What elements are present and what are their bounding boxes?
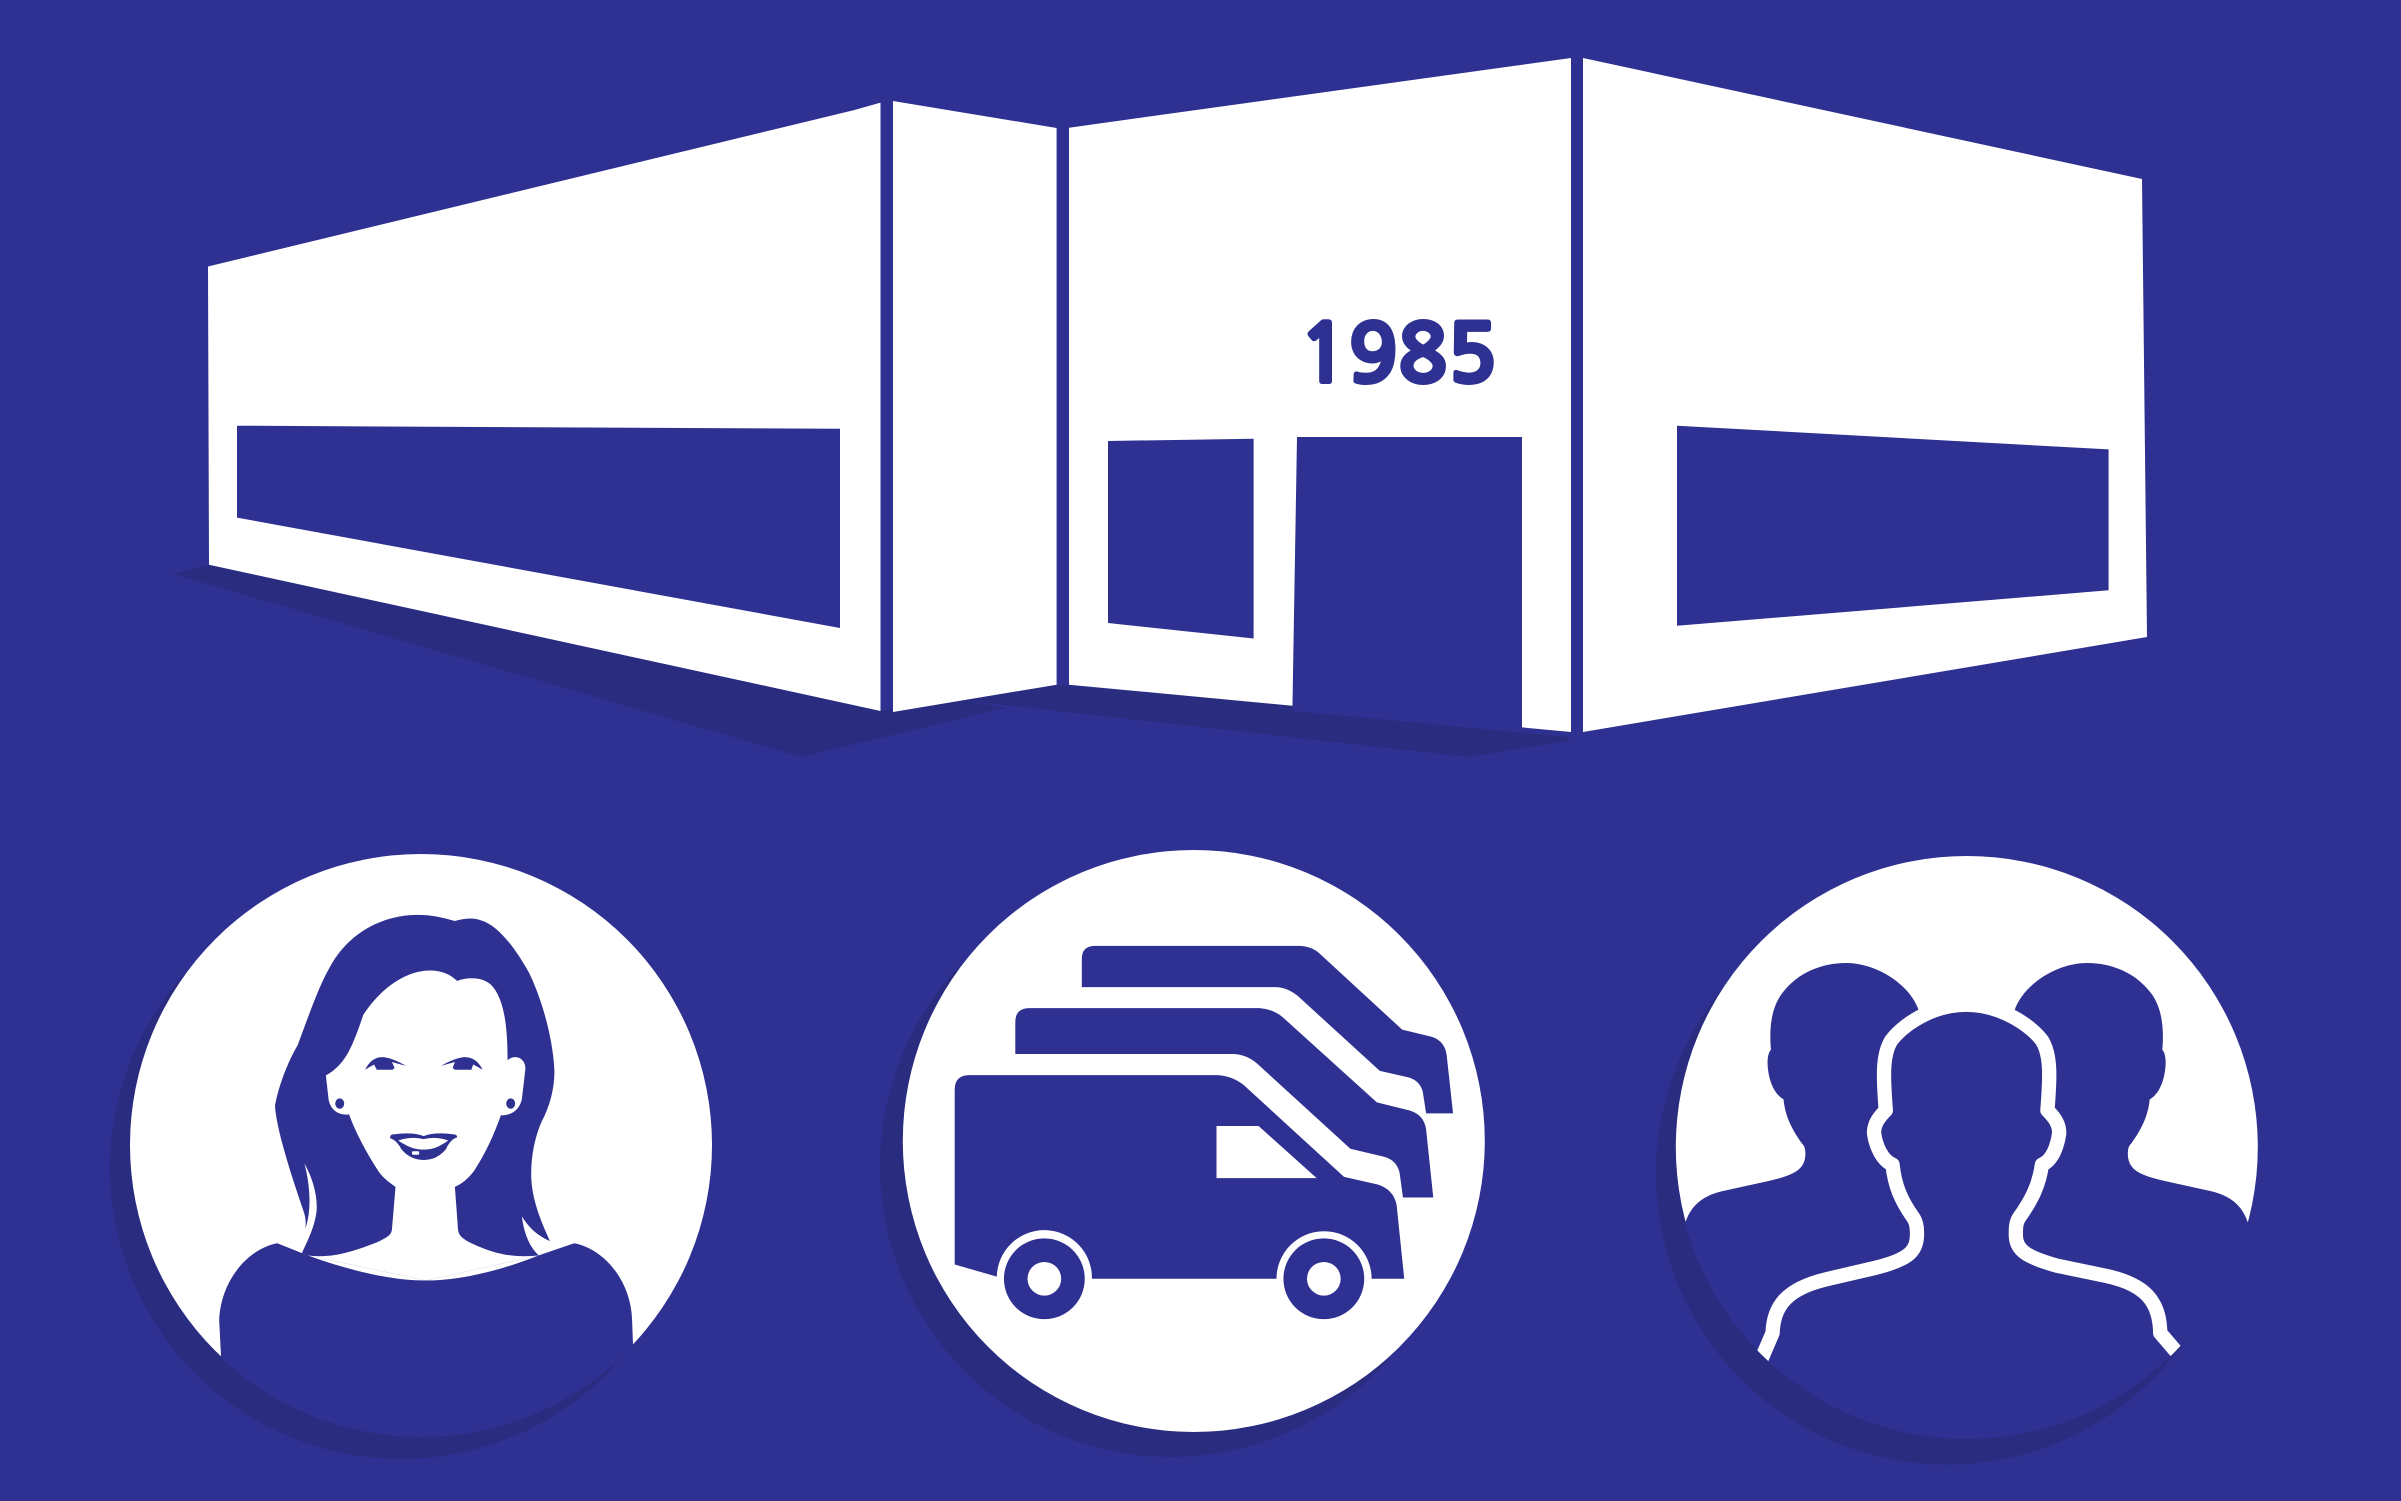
entrance door: [1292, 437, 1522, 731]
circle icon: woman: [110, 854, 712, 1494]
circle shadow: [880, 875, 1462, 1457]
front van body: [955, 1075, 1404, 1279]
circle shadow: [110, 877, 692, 1459]
woman figure: [219, 915, 633, 1494]
people silhouettes: [1685, 963, 2248, 1439]
centre wall window: [1108, 439, 1254, 638]
left earring: [335, 1098, 344, 1109]
right person: [1972, 963, 2248, 1439]
circle shadow: [1656, 883, 2238, 1465]
left eye: [365, 1057, 406, 1070]
torso: [219, 1243, 633, 1437]
mouth: [390, 1133, 457, 1160]
van fleet: [955, 946, 1453, 1319]
right wall window: [1677, 426, 2109, 626]
middle van: [1015, 1008, 1433, 1198]
rear wheel: [1004, 1238, 1085, 1319]
lip highlight: [412, 1151, 419, 1155]
right wall: [1583, 58, 2147, 732]
van window: [1217, 1126, 1317, 1178]
left wall: [208, 103, 880, 711]
back van: [1082, 946, 1453, 1113]
year sign: 1985: [1299, 315, 1497, 394]
white disc: [903, 850, 1485, 1432]
corner column: [893, 101, 1057, 712]
hair: [275, 915, 554, 1281]
building: [173, 58, 2147, 757]
left wall window: [237, 426, 840, 628]
left person: [1685, 963, 1961, 1439]
building ground shadow: [173, 565, 1569, 757]
face and neck: [308, 970, 539, 1281]
right eye: [441, 1057, 483, 1070]
white disc: [130, 854, 712, 1436]
white disc: [1676, 856, 2258, 1438]
centre person with white outline: [1754, 1005, 2187, 1377]
circle icon: delivery vans: [880, 850, 1485, 1457]
teeth: [398, 1138, 448, 1150]
right earring: [506, 1098, 515, 1109]
centre wall: [1069, 58, 1571, 732]
circle icon: group of people: [1656, 856, 2258, 1464]
front wheel: [1283, 1238, 1364, 1319]
